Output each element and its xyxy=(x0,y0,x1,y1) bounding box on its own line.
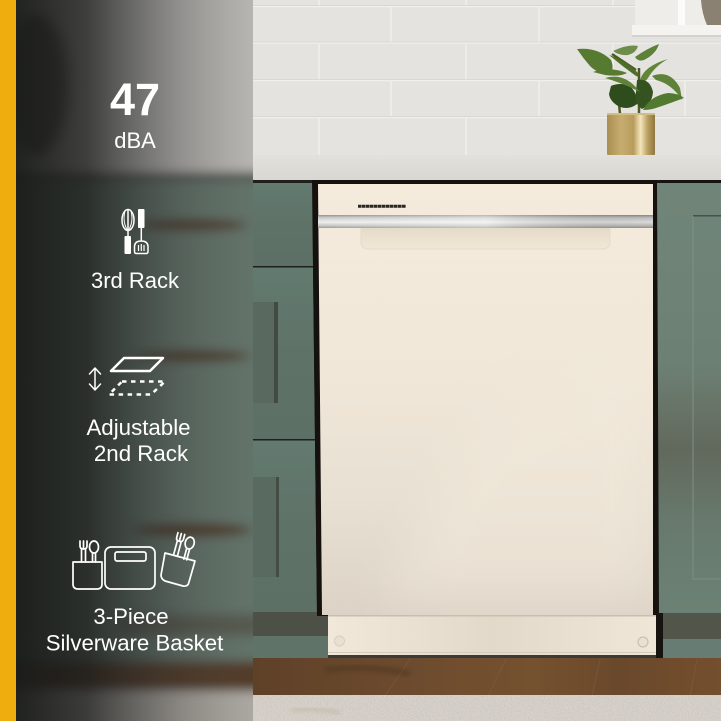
countertop xyxy=(253,155,721,180)
label: Adjustable xyxy=(86,415,191,440)
feature: 3rd Rack xyxy=(91,209,180,293)
unit dBA: dBA xyxy=(114,128,156,153)
dishwasher xyxy=(312,180,657,658)
rug xyxy=(253,695,721,721)
feature: Adjustable 2nd Rack xyxy=(86,358,191,466)
door light patch xyxy=(431,544,622,582)
translucent blurred left panel xyxy=(16,0,253,721)
number 47: 47 xyxy=(110,74,160,125)
door panel xyxy=(318,184,653,615)
label: 3-Piece xyxy=(93,604,169,629)
wood floor xyxy=(253,658,721,696)
feature: 3-Piece Silverware Basket xyxy=(46,533,223,656)
photo scene: kitchen wall xyxy=(253,0,721,156)
feature: Adjustable 2nd Rack: 2nd Rack xyxy=(94,441,189,466)
icon: three basket pieces xyxy=(73,533,196,589)
icon: whisk and spatula xyxy=(122,209,148,254)
feature: 47 dBA xyxy=(110,74,160,153)
icon: adjustable rack xyxy=(90,358,165,394)
door handle xyxy=(318,215,653,228)
potted plant xyxy=(577,44,684,155)
left cabinets xyxy=(253,180,330,660)
right cabinet xyxy=(653,180,721,660)
wall shelf with stone pot xyxy=(632,0,721,37)
toe kick xyxy=(328,615,656,658)
feature: 3-Piece Silverware Basket: Silverware Basket xyxy=(46,630,223,656)
yellow accent bar xyxy=(0,0,16,721)
label: 3rd Rack xyxy=(91,268,180,293)
handle recess xyxy=(361,228,610,249)
gold pot xyxy=(607,113,655,155)
vent slots xyxy=(358,205,406,208)
plant leaves xyxy=(577,44,684,114)
